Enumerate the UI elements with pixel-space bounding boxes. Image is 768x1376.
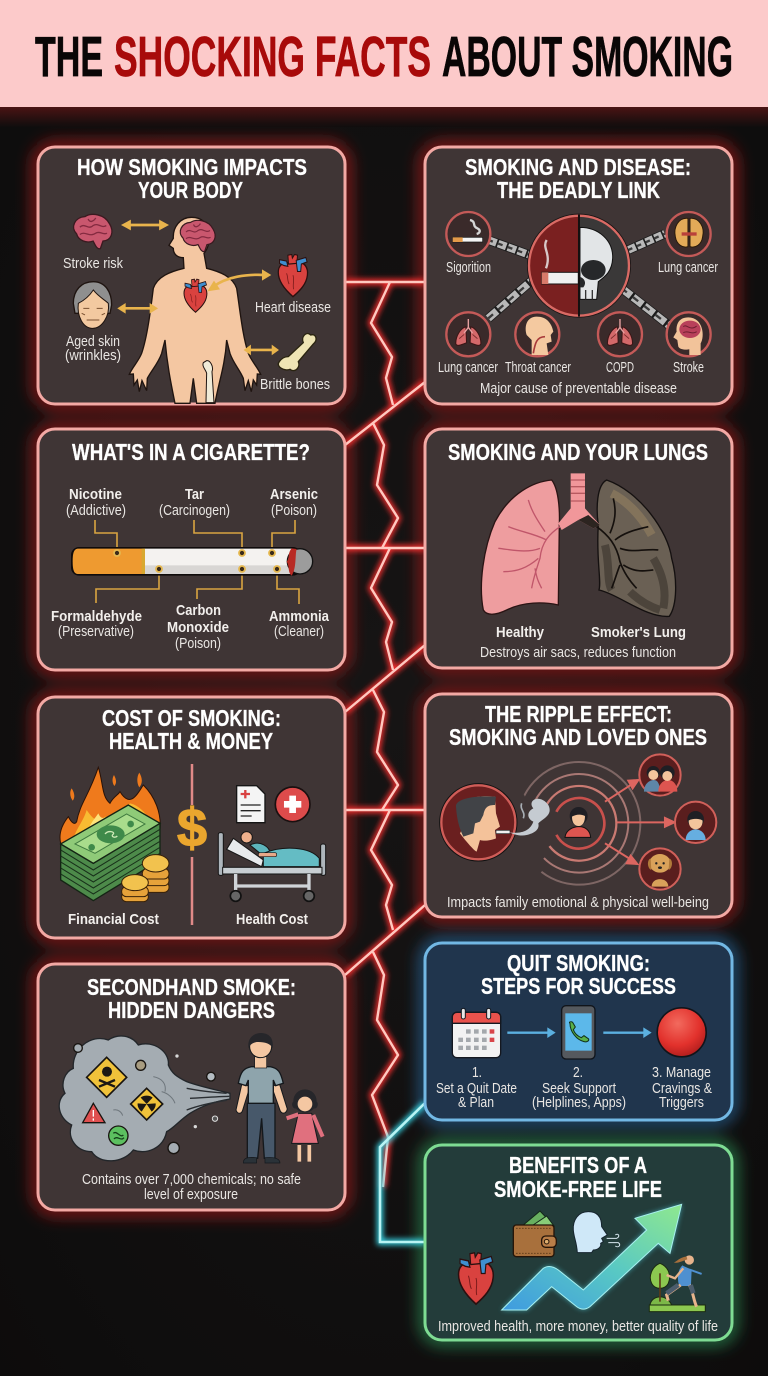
step two: (Helplines, Apps) [532, 1095, 626, 1111]
brain in head [180, 220, 215, 252]
step three: Triggers [659, 1095, 704, 1111]
heading: QUIT SMOKING: [507, 950, 650, 976]
stroke label: Stroke [673, 360, 704, 376]
panel: cost of smoking [38, 697, 345, 938]
icon: red ball [657, 1008, 706, 1057]
panel: quit smoking [425, 943, 732, 1120]
icon: calendar [452, 1008, 501, 1058]
tar label: Tar [185, 486, 204, 503]
step three: 3. Manage [652, 1065, 711, 1081]
icon: lungs circle left [446, 312, 490, 356]
icon: heart [278, 254, 308, 297]
icon: aged face [73, 282, 112, 328]
caption: Impacts family emotional & physical well-being [447, 895, 709, 911]
icon: breathing head [573, 1212, 620, 1253]
leader lines [95, 520, 299, 604]
step three [652, 1065, 712, 1111]
icon: brain circle [667, 212, 711, 256]
marker dots [114, 550, 280, 572]
panel: smoking and your lungs [425, 429, 732, 668]
panel: what's in a cigarette [38, 429, 345, 670]
aged skin label: (wrinkles) [65, 348, 121, 364]
icon: father and daughter [236, 1033, 323, 1163]
tar label [159, 486, 230, 519]
icon: child [675, 802, 716, 843]
caption: Destroys air sacs, reduces function [480, 645, 676, 661]
blue connector [380, 1103, 425, 1242]
heading: SMOKING AND LOVED ONES [449, 724, 707, 750]
step two: 2. [573, 1065, 583, 1081]
step one: 1. [472, 1065, 482, 1081]
smoker's lung label: Smoker's Lung [591, 624, 686, 641]
heading: YOUR BODY [138, 177, 243, 203]
icon: brain [74, 214, 112, 249]
aged skin label: Aged skin [66, 334, 120, 350]
heading: SMOKING AND DISEASE: [465, 154, 691, 180]
heading [77, 154, 307, 203]
cigarette [71, 547, 313, 576]
step one: Set a Quit Date [436, 1081, 517, 1097]
step one: & Plan [458, 1095, 494, 1111]
panel: ripple effect [425, 694, 732, 917]
heading: THE RIPPLE EFFECT: [485, 701, 672, 727]
heading [494, 1152, 662, 1202]
lung cancer label: Lung cancer [438, 360, 498, 376]
panel: secondhand smoke [38, 964, 345, 1210]
aged skin label [65, 334, 121, 364]
nicotine label [66, 486, 126, 519]
title: THE [35, 25, 103, 89]
formaldehyde label: (Preservative) [58, 624, 134, 640]
heading [481, 950, 676, 999]
divider [191, 764, 193, 925]
icon: heart [459, 1253, 493, 1304]
lung cancer label top: Lung cancer [658, 260, 718, 276]
icon: bone [278, 334, 316, 371]
panel: benefits [425, 1145, 732, 1340]
stroke risk label: Stroke risk [63, 256, 124, 272]
icon: rising arrow [502, 1204, 682, 1310]
icon: COPD circle [598, 312, 642, 356]
heading [465, 154, 691, 203]
header band [0, 0, 768, 107]
heading [102, 705, 281, 754]
brittle bones label: Brittle bones [260, 377, 330, 393]
ammonia label: Ammonia [269, 608, 330, 625]
caption: level of exposure [144, 1187, 238, 1203]
carbon monoxide label: Carbon [176, 602, 221, 619]
caption [82, 1172, 301, 1203]
caption: Improved health, more money, better quality of life [438, 1319, 718, 1335]
heading: SMOKE-FREE LIFE [494, 1176, 662, 1202]
nicotine label: Nicotine [69, 486, 122, 503]
heading [449, 701, 707, 750]
COPD label: COPD [606, 360, 634, 376]
central skull and cigarette [527, 214, 631, 318]
heading: STEPS FOR SUCCESS [481, 973, 676, 999]
step two: Seek Support [542, 1081, 616, 1097]
step three: Cravings & [652, 1081, 712, 1097]
heading: HEALTH & MONEY [109, 728, 273, 754]
sigorition label: Sigorition [446, 260, 491, 276]
heading: THE DEADLY LINK [497, 177, 660, 203]
formaldehyde label [51, 608, 142, 640]
heart in chest [184, 279, 207, 312]
icon: cigarette circle [446, 212, 490, 256]
panel: smoking and disease [425, 147, 732, 404]
step one [436, 1065, 517, 1111]
heading: COST OF SMOKING: [102, 705, 281, 731]
lungs illustration [481, 473, 676, 616]
throat cancer label: Throat cancer [505, 360, 571, 376]
icon: throat circle [515, 312, 559, 356]
arrow two [603, 1027, 652, 1038]
healthy label: Healthy [496, 624, 545, 641]
header glow [0, 107, 768, 127]
heart disease label: Heart disease [255, 300, 331, 316]
chains [488, 234, 669, 325]
heading: HOW SMOKING IMPACTS [77, 154, 307, 180]
ammonia label [269, 608, 330, 640]
arrow one [507, 1027, 556, 1038]
icon: smoker [440, 784, 550, 861]
icon: runner and tree [649, 1255, 705, 1312]
icon: central person [565, 807, 591, 837]
body illustration [129, 217, 261, 403]
formaldehyde label: Formaldehyde [51, 608, 142, 625]
nicotine label: (Addictive) [66, 503, 126, 519]
icon: couple [639, 754, 681, 796]
financial cost label: Financial Cost [68, 911, 159, 928]
carbon monoxide label: Monoxide [167, 619, 229, 636]
ammonia label: (Cleaner) [274, 624, 324, 640]
panel: how smoking impacts your body [38, 147, 345, 404]
icon: phone [562, 1006, 595, 1059]
heading: SECONDHAND SMOKE: [87, 974, 296, 1000]
heading: WHAT'S IN A CIGARETTE? [72, 439, 310, 465]
icon: dog [639, 848, 681, 890]
blue and green panel glows [425, 943, 732, 1340]
health cost label: Health Cost [236, 911, 308, 928]
icon: wallet [513, 1211, 556, 1257]
icon: toxic smoke cloud [59, 1036, 230, 1161]
carbon monoxide label: (Poison) [175, 636, 221, 652]
heading [87, 974, 296, 1023]
panel glows [38, 147, 732, 1210]
dollar sign: $ [177, 798, 207, 858]
icon: hospital bed and records [218, 786, 326, 901]
arrows [117, 220, 279, 355]
tar label: (Carcinogen) [159, 503, 230, 519]
icon: stroke circle [667, 312, 711, 356]
icon: burning money [60, 767, 169, 902]
ripple rings [496, 741, 661, 906]
carbon monoxide label [167, 602, 229, 652]
arsenic label: (Poison) [271, 503, 317, 519]
arsenic label [270, 486, 318, 519]
step two [532, 1065, 626, 1111]
arsenic label: Arsenic [270, 486, 318, 503]
arrows [605, 780, 674, 864]
caption: Contains over 7,000 chemicals; no safe [82, 1172, 301, 1188]
heading: BENEFITS OF A [509, 1152, 647, 1178]
heading: SMOKING AND YOUR LUNGS [448, 439, 708, 465]
title: SHOCKING FACTS [114, 25, 431, 89]
red lightning connectors [345, 282, 425, 1187]
caption: Major cause of preventable disease [480, 381, 677, 397]
heading: HIDDEN DANGERS [108, 997, 275, 1023]
